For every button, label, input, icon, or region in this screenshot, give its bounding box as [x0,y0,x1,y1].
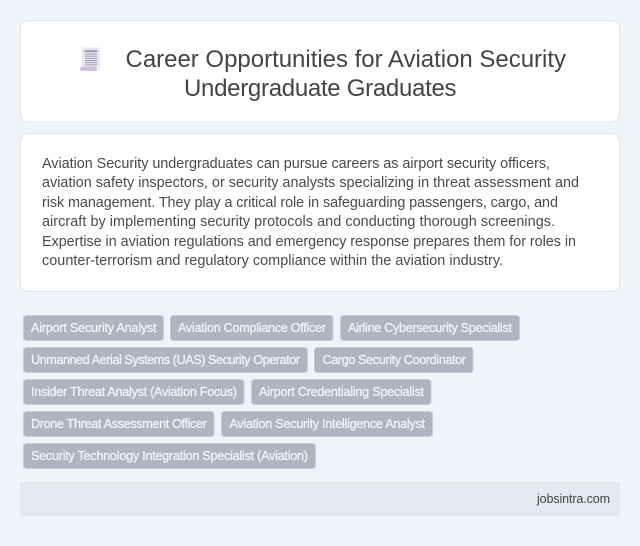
text block: description: Expertise in aviation regulations and emergency response prepares them for roles in [42,234,576,250]
tag: Unmanned Aerial Systems (UAS) Security Operator: Unmanned Aerial Systems (UAS) Security Operator [31,353,300,367]
panel: header [20,20,620,122]
tag: Drone Threat Assessment Officer: Drone Threat Assessment Officer [31,417,207,431]
tag: Airport Security Analyst: Airport Security Analyst [31,321,157,335]
text block: description: aviation safety inspectors, or security analysts specializing in threat assessment and [42,175,579,191]
tag: Aviation Compliance Officer [170,316,333,340]
tag: Insider Threat Analyst (Aviation Focus): Insider Threat Analyst (Aviation Focus) [31,385,237,399]
tag: Aviation Security Intelligence Analyst: Aviation Security Intelligence Analyst [230,417,426,431]
title: Undergraduate Graduates [184,75,456,102]
tag: Aviation Security Intelligence Analyst [222,412,432,436]
text block: description: aircraft by implementing security protocols and conducting thorough screenings. [42,214,555,230]
footer text: source: jobsintra.com [536,492,610,506]
tag: Cargo Security Coordinator: Cargo Security Coordinator [322,353,466,367]
tag list [24,316,520,468]
text block: description: Aviation Security undergraduates can pursue careers as airport security officers, [42,156,550,172]
tag: Drone Threat Assessment Officer [24,412,214,436]
text block: description: risk management. They play a critical role in safeguarding passengers, cargo, and [42,195,558,211]
icon: document scroll [80,48,100,71]
tag: Unmanned Aerial Systems (UAS) Security Operator [24,348,308,372]
tag: Airport Credentialing Specialist: Airport Credentialing Specialist [259,385,424,399]
text block: description: counter-terrorism and regulatory compliance within the aviation industry. [42,253,503,269]
tag: Security Technology Integration Specialist (Aviation): Security Technology Integration Specialist (Aviation) [31,449,308,463]
panel: description [20,134,620,292]
tag: Insider Threat Analyst (Aviation Focus) [24,380,244,404]
title [126,46,566,102]
tag: Airline Cybersecurity Specialist: Airline Cybersecurity Specialist [348,321,512,335]
title: Career Opportunities for Aviation Security [126,46,566,73]
footer [20,482,620,516]
tag: Airline Cybersecurity Specialist [340,316,520,340]
tag: Cargo Security Coordinator [314,348,473,372]
tag: Security Technology Integration Specialist (Aviation) [24,444,316,468]
tag: Airport Credentialing Specialist [252,380,431,404]
tag: Airport Security Analyst [24,316,164,340]
text block: description [42,156,579,269]
tag: Aviation Compliance Officer: Aviation Compliance Officer [178,321,326,335]
